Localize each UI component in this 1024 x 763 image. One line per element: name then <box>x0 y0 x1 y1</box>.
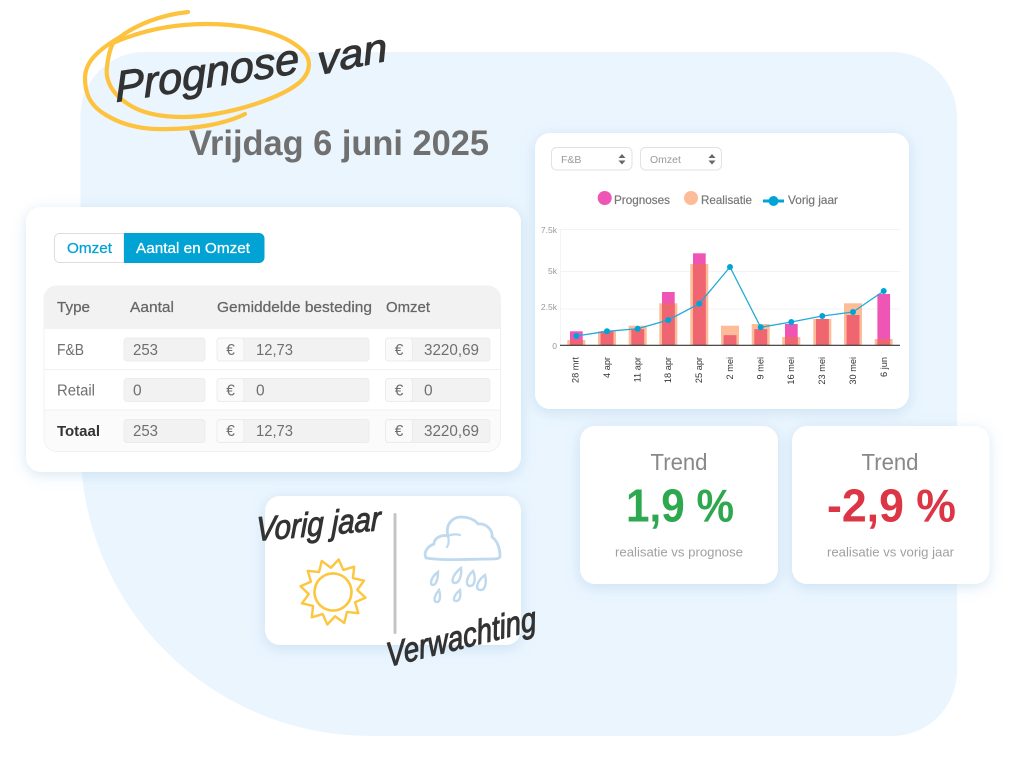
panel: trend realisatie vs vorig jaar <box>792 426 990 584</box>
x axis labels: 25 apr <box>694 357 704 383</box>
row: Totaal: Totaal <box>57 423 100 440</box>
x axis labels: 9 mei <box>756 357 766 379</box>
legend: Vorig jaar <box>788 193 838 207</box>
panel: trend realisatie vs prognose <box>580 426 778 584</box>
row: Totaal: 253 <box>133 423 158 440</box>
x axis labels: 16 mei <box>786 357 796 385</box>
x axis labels <box>570 357 889 385</box>
panel: trend realisatie vs vorig jaar: realisatie vs vorig jaar <box>827 544 955 560</box>
x axis labels: 30 mei <box>848 357 858 385</box>
row: F&B: F&B <box>57 342 84 359</box>
legend: Realisatie <box>701 193 752 207</box>
legend <box>598 191 838 207</box>
row: Totaal: € <box>226 423 235 440</box>
row: F&B <box>57 338 490 361</box>
row: Retail: 0 <box>256 382 265 400</box>
line: vorig jaar <box>573 264 887 339</box>
bars: overlap <box>570 264 890 345</box>
word: Prognose: Prognose <box>114 35 300 112</box>
panel: trend realisatie vs prognose: 1,9 % <box>626 480 734 532</box>
x axis labels: 2 mei <box>725 357 735 379</box>
row: Totaal: 12,73 <box>256 423 293 440</box>
word: van: van <box>315 25 389 84</box>
row: Retail: Retail <box>57 382 95 400</box>
background panel <box>80 52 957 736</box>
y axis labels: 0 <box>552 341 557 351</box>
panel: trend realisatie vs vorig jaar: Trend <box>862 449 918 475</box>
toggle buttons: Omzet <box>67 241 112 257</box>
table header: Type <box>57 299 90 316</box>
bar chart <box>541 225 900 385</box>
label: Verwachting: Verwachting <box>384 600 539 675</box>
panel: chart <box>535 133 909 409</box>
panel: trend realisatie vs prognose: realisatie vs prognose <box>615 544 743 560</box>
row: F&B: € <box>226 342 235 359</box>
scribble circle <box>85 12 309 129</box>
select: Omzet <box>640 148 722 170</box>
table header: Omzet <box>386 299 431 316</box>
x axis labels: 28 mrt <box>570 357 580 383</box>
row: Retail: € <box>395 382 404 400</box>
select: F&B <box>552 148 632 170</box>
row: Retail <box>57 378 490 402</box>
icon: sun <box>295 554 371 630</box>
panel: table <box>26 207 521 472</box>
row: F&B: 253 <box>133 342 158 359</box>
label: Vorig jaar: Vorig jaar <box>256 500 382 549</box>
toggle buttons <box>54 233 264 263</box>
table header <box>57 299 431 316</box>
row: F&B: € <box>395 342 404 359</box>
x axis labels: 18 apr <box>663 357 673 383</box>
row: Totaal <box>57 420 490 442</box>
select: Omzet: Omzet <box>650 154 681 166</box>
table header: Aantal <box>130 299 174 316</box>
row: Totaal: € <box>395 423 404 440</box>
x axis labels: 23 mei <box>817 357 827 385</box>
legend: Prognoses <box>614 193 670 207</box>
panel: trend realisatie vs prognose: Trend <box>650 449 708 475</box>
icon: rain cloud <box>425 517 500 602</box>
row: F&B: 3220,69 <box>424 342 479 359</box>
panel: trend realisatie vs vorig jaar: -2,9 % <box>827 480 956 532</box>
select: F&B: F&B <box>561 154 581 166</box>
bars: prognoses <box>570 253 890 345</box>
y axis labels: 7.5k <box>541 225 558 235</box>
panel: weather <box>256 496 539 675</box>
y axis labels: 5k <box>548 266 558 276</box>
x axis labels: 4 apr <box>602 357 612 378</box>
heading: date: Vrijdag 6 juni 2025 <box>189 124 489 163</box>
row: Totaal: 3220,69 <box>424 423 479 440</box>
bars: realisatie <box>567 264 893 345</box>
y axis labels <box>541 225 558 351</box>
data table <box>44 286 500 452</box>
x axis labels: 6 jun <box>879 357 889 377</box>
row: F&B: 12,73 <box>256 342 293 359</box>
y axis labels: 2.5k <box>541 302 558 312</box>
title: Prognose van <box>85 12 389 129</box>
row: Retail: 0 <box>133 382 142 400</box>
table header: Gemiddelde besteding <box>217 299 372 316</box>
row: Retail: € <box>226 382 235 400</box>
x axis labels: 11 apr <box>632 357 642 382</box>
row: Retail: 0 <box>424 382 433 400</box>
toggle buttons: Aantal en Omzet <box>136 241 250 257</box>
